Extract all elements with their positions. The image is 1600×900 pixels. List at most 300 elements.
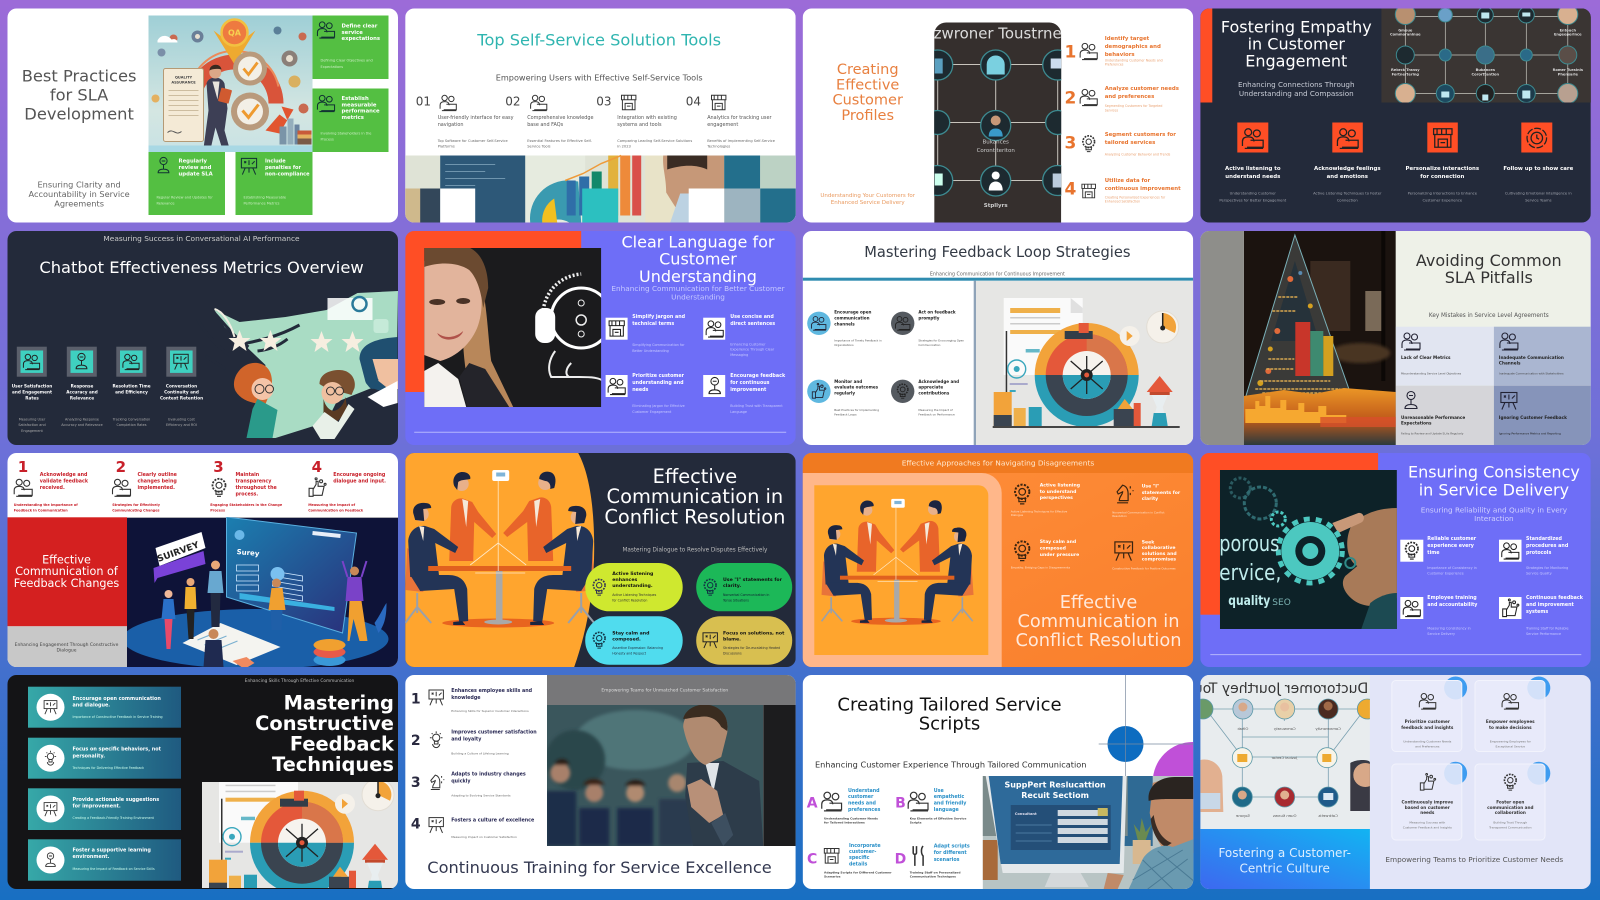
step C: Scenarios	[824, 874, 841, 878]
step 2: changes being	[138, 478, 177, 484]
heading: Communication in	[607, 485, 783, 508]
photo: team leader pointing	[545, 705, 763, 846]
tip: open communication: Encourage open communication	[72, 696, 161, 702]
heading: for SLA	[50, 86, 108, 104]
step 3: 3	[213, 458, 224, 476]
metric 3	[112, 347, 151, 427]
step A: preferences	[848, 807, 881, 813]
card: active listening	[585, 563, 683, 611]
step 1: Feedback in Communication	[14, 508, 68, 512]
step 3: Segment customers for	[1105, 132, 1176, 138]
step A	[807, 788, 881, 824]
metric 3: Resolution Time	[112, 384, 151, 388]
item: simplify jargon: Simplifying Communication for	[632, 343, 685, 347]
panel: Continuous Training for Service Excellence	[405, 675, 796, 889]
item: acknowledge feelings	[1313, 122, 1382, 202]
step 1: Identify target	[1105, 36, 1150, 42]
pitfall: unreasonable expectations: Unreasonable Performance	[1401, 415, 1465, 420]
heading: Effective	[836, 78, 899, 94]
step 3	[210, 458, 283, 512]
item: reliable experience: Importance of Consistency in	[1427, 566, 1477, 570]
subtitle: Key Mistakes in Service Level Agreements	[1429, 313, 1549, 319]
step C: specific	[849, 855, 870, 861]
item 4: 4	[411, 816, 421, 832]
item: encourage feedback: for continuous	[730, 380, 770, 386]
dark side strip	[763, 705, 796, 846]
step 2: Strategies for Effectively	[112, 503, 161, 507]
card: foster collaboration: collaboration	[1495, 810, 1526, 815]
heading: Continuous Training for Service Excellence	[427, 858, 772, 877]
panel: Creating Effective Customer Profiles	[803, 8, 1193, 238]
item: employee training: Employee training	[1427, 595, 1477, 601]
callout: include penalties for non-compliance: Performance Metrics	[244, 201, 280, 205]
card: active listening: for Conflict Resolution	[612, 598, 647, 602]
item: acknowledge contributions: Measuring the Impact of	[918, 408, 954, 412]
item: encourage open channels: Encourage open	[834, 310, 871, 314]
tip: actionable suggestions: Provide actionable suggestions	[72, 797, 159, 803]
title block: Communication of	[15, 565, 119, 578]
panel: Effective Communication of Feedback Changes	[8, 453, 398, 669]
callout: include penalties for non-compliance: Include	[265, 158, 286, 164]
panel: Clear Language for Customer Understanding	[405, 231, 796, 445]
step B: empathetic	[934, 794, 965, 800]
callout: establish measurable performance metrics: metrics	[342, 115, 364, 121]
approach: use I statements	[1112, 484, 1181, 518]
metric 4	[160, 347, 203, 427]
item: encourage feedback	[703, 373, 786, 414]
card: stay calm: Assertive Expression: Balancing	[612, 646, 663, 650]
photo: mirrored customer journey map	[1158, 675, 1377, 829]
item 1	[411, 688, 533, 713]
step A: for Tailored Interactions	[824, 820, 865, 824]
illustration: feedback stars and people	[198, 291, 398, 439]
subtitle block: Dialogue	[57, 648, 77, 654]
illustration: survey	[122, 517, 398, 669]
photo: gear and hand: SEO	[1272, 598, 1291, 608]
illustration: meeting table	[405, 470, 595, 628]
card: stay calm	[585, 616, 683, 665]
callout: define clear service expectations	[312, 16, 388, 79]
step 3: Engaging Stakeholders in the Change	[210, 503, 283, 507]
photo: mirrored customer journey map: Soyone	[1235, 813, 1250, 818]
subtitle: Ensuring Clarity and	[38, 180, 121, 190]
approach: use I statements: Nonverbal Communication in Conflict	[1112, 510, 1165, 514]
step 1: Acknowledge and	[40, 472, 88, 478]
item: standardized procedures: Strategies for Monitoring	[1526, 566, 1568, 570]
item: reliable experience: time	[1427, 550, 1440, 556]
panel: Top Self-Service Solution Tools	[405, 8, 796, 222]
approach: stay calm: under pressure	[1040, 552, 1079, 558]
heading: Chatbot Effectiveness Metrics Overview	[39, 258, 364, 277]
card: prioritize feedback	[1392, 676, 1467, 752]
decorative circle: blue	[1108, 726, 1144, 762]
panel: Best Practices for SLA Development	[8, 8, 398, 222]
accent bar	[1200, 8, 1212, 102]
panel: Ensuring Consistency in Service Delivery	[1200, 453, 1591, 667]
orange curved backdrop	[405, 453, 594, 667]
card: active listening: Active listening	[612, 571, 653, 577]
title block	[1200, 829, 1370, 889]
step 1: Understanding the Importance of	[14, 503, 78, 507]
step B: and friendly	[934, 800, 967, 806]
photo: gear and hand: ervice,	[1219, 561, 1281, 586]
subtitle: Interaction	[1474, 514, 1514, 523]
card: continuously improve: needs	[1420, 810, 1435, 815]
step 4: Enhanced Satisfaction	[1105, 200, 1140, 204]
heading: Profiles	[841, 108, 894, 124]
metric 2: Accuracy and	[66, 390, 98, 394]
approach: seek solutions: collaborative	[1142, 545, 1176, 551]
item: acknowledge contributions: Feedback on Performance	[918, 412, 955, 416]
item: act on feedback: Strategies for Encouraging Open	[918, 338, 964, 342]
step C: Adapting Scripts for Different Customer	[824, 870, 892, 874]
heading: Effective	[1060, 592, 1137, 613]
panel: Effective Communication in Conflict Resolution (orange)	[803, 453, 1193, 667]
heading: Conflict Resolution	[1015, 630, 1182, 651]
step 4: dialogue and input.	[333, 478, 386, 484]
tool 02: 02	[505, 94, 520, 108]
photo: monitor and support agent: SuppPert Reslucattion	[1004, 780, 1106, 790]
illustration: survey: SUIRVEY	[156, 540, 201, 565]
metric 4: Evaluating Cost	[168, 418, 195, 422]
step 2	[1064, 86, 1179, 112]
tool 04: Analytics for tracking user	[707, 115, 772, 121]
card: empower employees: to make decisions	[1489, 725, 1532, 730]
metric 1: Rates	[25, 396, 39, 400]
card: prioritize feedback: Prioritize customer	[1405, 719, 1451, 724]
step 3: transparency	[236, 478, 272, 484]
item 2: Building a Culture of Lifelong Learning	[451, 751, 509, 755]
step 4: Utilize data for	[1105, 178, 1151, 184]
item: prioritize understanding: Prioritize customer	[632, 373, 685, 379]
step 1: Preferences	[1105, 62, 1124, 66]
item: acknowledge contributions: Acknowledge and	[918, 379, 959, 384]
step 4: continuous improvement	[1105, 186, 1181, 192]
item 1: 1	[411, 692, 421, 708]
item: follow up	[1503, 122, 1574, 202]
approach: stay calm: composed	[1040, 546, 1066, 552]
photo: customer journey network: Corontiteriton	[977, 148, 1015, 154]
approach: seek solutions: Seek	[1142, 540, 1155, 546]
card: active listening: understanding.	[612, 583, 653, 589]
step B: Key Elements of Effective Service	[910, 816, 966, 820]
heading: Top Self-Service Solution Tools	[476, 30, 721, 50]
item: concise sentences: Experience Through Clear	[730, 348, 775, 352]
tip: open communication	[28, 687, 181, 728]
illustration: survey: Surey	[236, 548, 260, 558]
callout: regularly review and update SLA: Regularly	[178, 158, 208, 164]
step D	[895, 844, 970, 878]
item: monitor outcomes	[807, 379, 879, 416]
panel: Avoiding Common SLA Pitfalls	[1200, 231, 1591, 445]
top caption: Effective Approaches for Navigating Disagreements	[902, 458, 1094, 467]
callout: regularly review and update SLA: review and	[178, 165, 212, 171]
photo: engagement network: Gmoue	[1398, 28, 1413, 32]
approach: stay calm: Stay calm and	[1040, 539, 1076, 545]
heading: Engagement	[1245, 52, 1347, 70]
heading: Effective	[653, 465, 737, 488]
item: active listening: understand needs	[1225, 174, 1280, 180]
tool 03: systems and tools	[617, 122, 662, 128]
metric 4: Conversation	[166, 384, 197, 388]
item: act on feedback: promptly	[918, 315, 940, 320]
step 2: 2	[116, 458, 126, 476]
card: foster collaboration: Building Trust Through	[1493, 820, 1527, 824]
item: act on feedback: Act on feedback	[918, 310, 956, 314]
callout: establish measurable performance metrics	[312, 88, 388, 152]
item: acknowledge contributions: contributions	[918, 390, 950, 396]
pitfall: lack of clear metrics: Lack of Clear Metrics	[1401, 355, 1451, 360]
heading: Creating	[837, 62, 899, 78]
card: foster collaboration: Foster open	[1496, 800, 1524, 804]
card: focus on solutions	[696, 616, 792, 665]
step 1: behaviors	[1105, 52, 1135, 58]
card: continuously improve: Customer Feedback and Insights	[1403, 825, 1452, 829]
title block	[8, 517, 127, 626]
step 2: Segmenting Customers for Targeted	[1105, 104, 1162, 108]
metric 2: Accuracy and Relevance	[61, 423, 103, 427]
step B: B	[895, 796, 906, 812]
tool 03: 03	[596, 94, 611, 108]
tool 01: Top Software for Customer Self-Service	[437, 139, 508, 143]
tool 04: engagement	[707, 122, 738, 128]
card: prioritize feedback: and Preferences	[1415, 744, 1440, 748]
step A: Understand	[848, 788, 880, 794]
approach: seek solutions: compromises	[1142, 556, 1176, 562]
item: acknowledge contributions: appreciate	[918, 384, 943, 390]
metric 2: Response	[71, 384, 94, 388]
metric 3: Completion Rates	[116, 423, 147, 427]
item: simplify jargon: Simplify jargon and	[632, 314, 686, 320]
top caption: Measuring Success in Conversational AI Performance	[103, 234, 300, 243]
tool 01: Platforms	[438, 144, 455, 148]
item 1: Enhances employee skills and	[451, 688, 533, 694]
panel: Effective Communication in Conflict Resolution (dark)	[405, 453, 796, 667]
panel: Creating Tailored Service Scripts	[803, 675, 1233, 889]
photo: engagement network: Phensarie	[1558, 72, 1578, 76]
metric 2	[61, 347, 103, 427]
item: employee training	[1400, 595, 1478, 636]
callout: regularly review and update SLA: Regular Review and Updates for	[156, 196, 213, 200]
callout: regularly review and update SLA: update SLA	[178, 172, 214, 178]
item: personalize interactions: Personalizing Interactions to Enhance	[1408, 192, 1478, 196]
step 3: throughout the	[236, 485, 278, 491]
tool 01: 01	[416, 94, 431, 108]
item: reliable experience: Reliable customer	[1427, 536, 1477, 542]
item: prioritize understanding	[606, 373, 685, 414]
illustration: quality assurance	[148, 16, 312, 152]
item 4: Fosters a culture of excellence	[451, 817, 535, 823]
card: foster collaboration: Transparent Communication	[1488, 825, 1532, 829]
item 2	[411, 730, 537, 755]
tip: specific behaviors	[28, 738, 181, 779]
item: personalize interactions: Customer Experience	[1422, 198, 1463, 202]
item: active listening	[1219, 122, 1287, 202]
step 2: Clearly outline	[138, 472, 178, 478]
tool 03: Integration with existing	[617, 115, 677, 121]
illustration: quality assurance: ASSURANCE	[171, 80, 196, 84]
item: prioritize understanding: Customer Engagement	[632, 410, 672, 414]
item: standardized procedures: protocols	[1526, 550, 1551, 556]
pitfall: inadequate communication	[1494, 327, 1591, 386]
item: personalize interactions	[1405, 122, 1479, 202]
item: reliable experience: experience every	[1427, 543, 1475, 549]
step 1	[14, 458, 89, 512]
subtitle: Understanding and Compassion	[1239, 89, 1354, 98]
heading: Best Practices	[22, 66, 136, 86]
caption: Empowering Teams to Prioritize Customer Needs	[1385, 855, 1563, 864]
item: encourage feedback: Building Trust with Transparent	[730, 404, 783, 408]
card: continuously improve: based on customer	[1405, 805, 1451, 810]
item: continuous feedback	[1499, 595, 1584, 636]
step A: customer	[848, 794, 874, 800]
step A: Understanding Customer Needs	[824, 816, 878, 820]
item: acknowledge contributions	[891, 379, 959, 416]
photo: mirrored customer journey map: Comnerorsity	[1315, 726, 1341, 731]
approach: use I statements: Resolution	[1112, 514, 1127, 518]
photo: engagement network	[1381, 4, 1591, 104]
item: encourage open channels: channels	[834, 321, 855, 326]
subtitle: Ensuring Reliability and Quality in Every	[1421, 506, 1568, 514]
tool 04: Technologies	[706, 144, 730, 148]
step 4: Encourage ongoing	[333, 472, 386, 478]
step 1	[1064, 36, 1163, 66]
photo: gear and hand	[1219, 470, 1397, 629]
callout: establish measurable performance metrics: Process	[320, 138, 334, 142]
subtitle: Understanding	[671, 292, 725, 302]
item: personalize interactions: Personalize interactions	[1405, 166, 1479, 172]
subtitle: Agreements	[54, 198, 104, 208]
item: standardized procedures: Service Quality	[1526, 572, 1552, 576]
top band	[547, 675, 796, 705]
callout: establish measurable performance metrics: performance	[342, 109, 380, 115]
item: prioritize understanding: needs	[632, 387, 649, 393]
tip: supportive environment: Measuring the Impact of Feedback on Service Skills	[72, 867, 155, 871]
item: continuous feedback: Continuous feedback	[1526, 595, 1584, 601]
item: simplify jargon: Better Understanding	[632, 349, 669, 353]
item 4: Measuring Impact on Customer Satisfaction	[451, 835, 517, 839]
tool 02: Essential Features for Effective Self-	[527, 139, 593, 143]
photo: mirrored customer journey map: Ductoromer Jourthey Tourmey	[1158, 681, 1368, 697]
step 3	[1064, 132, 1176, 156]
card: continuously improve: Continuously improve	[1401, 800, 1453, 804]
item 2: 2	[411, 733, 421, 749]
item 3: quickly	[451, 779, 471, 785]
approach: use I statements: Use "I"	[1142, 484, 1159, 490]
item 3	[411, 772, 526, 797]
tip: specific behaviors: Focus on specific behaviors, not	[72, 747, 162, 753]
card: empower employees	[1475, 676, 1550, 752]
pitfall: ignoring feedback: Ignoring Performance Metrics and Reporting	[1499, 431, 1561, 435]
metric 2: Relevance	[70, 396, 94, 400]
item: active listening: Understanding Customer	[1230, 192, 1276, 196]
item: standardized procedures	[1499, 536, 1569, 576]
photo: engagement network: Bukances	[1476, 68, 1495, 72]
illustration: quality assurance: QA	[228, 28, 242, 38]
photo: engagement network: Rebrck Transy	[1391, 68, 1420, 72]
item: continuous feedback: Training Staff for Reliable	[1525, 626, 1569, 630]
item: act on feedback: Communication	[918, 343, 941, 347]
panel: Mastering Constructive Feedback Techniques	[8, 675, 398, 896]
item: simplify jargon: technical terms	[632, 321, 674, 327]
step A: needs and	[848, 800, 877, 806]
photo: engagement network: Cororttantion	[1472, 72, 1499, 76]
card: foster collaboration: communication and	[1487, 805, 1533, 810]
item 3: Adapts to industry changes	[451, 772, 526, 778]
subtitle: Empowering Users with Effective Self-Service Tools	[496, 72, 703, 82]
step D: Communication Techniques	[910, 874, 956, 878]
tool 01: navigation	[438, 122, 464, 128]
item: encourage open channels	[807, 310, 882, 347]
item 2: and loyalty	[451, 737, 482, 743]
callout: establish measurable performance metrics: Establish	[342, 96, 369, 102]
step 4: Measuring the Impact of	[308, 503, 356, 507]
title block: Effective	[42, 554, 91, 566]
pitfall: inadequate communication: Inadequate Communication	[1499, 355, 1564, 360]
approach: active listening: Dialogue	[1011, 513, 1023, 517]
photo: mirrored customer journey map: Ouen Kunws	[1273, 813, 1296, 818]
approach: use I statements: statements for	[1142, 490, 1181, 496]
step C: customer-	[849, 849, 876, 855]
pitfall: lack of clear metrics: Misunderstanding Service Level Objectives	[1401, 371, 1462, 375]
subtitle: Accountability in Service	[29, 189, 130, 199]
photo: mirrored customer journey map: Comwuraty	[1273, 726, 1296, 731]
panel: Fostering a Customer-Centric Culture	[1158, 675, 1591, 889]
item: concise sentences: direct sentences	[730, 321, 775, 327]
decorative circle: purple	[1153, 742, 1233, 822]
approach: seek solutions: solutions and	[1142, 551, 1177, 557]
item 1: knowledge	[451, 695, 481, 701]
subtitle: Mastering Dialogue to Resolve Disputes Effectively	[622, 548, 768, 554]
metric 2: Analyzing Response	[65, 418, 99, 422]
tool 02: Service Tools	[527, 144, 551, 148]
metric 1: and Engagement	[12, 390, 52, 394]
item: reliable experience: Customer Experience	[1427, 572, 1464, 576]
panel: Mastering Feedback Loop Strategies	[803, 231, 1193, 445]
item: continuous feedback: Service Performance	[1526, 632, 1561, 636]
panel: Chatbot Effectiveness Metrics Overview	[8, 231, 398, 445]
card: continuously improve: Measuring Success with	[1409, 820, 1445, 824]
tool 03	[596, 94, 692, 148]
photo: mirrored customer journey map: Cottrwetis	[1318, 813, 1338, 818]
pitfall: unreasonable expectations: Failing to Review and Update SLAs Regularly	[1401, 431, 1464, 435]
top caption: Enhancing Skills Through Effective Communication	[245, 678, 355, 684]
step 4: Creating Personalized Experiences for	[1105, 196, 1166, 200]
heading: Ensuring Consistency	[1408, 462, 1580, 482]
step C	[807, 843, 892, 878]
item: encourage feedback: Language	[730, 410, 747, 414]
callout: define clear service expectations: Defining Clear Objectives and	[320, 58, 373, 62]
metric 1: Measuring User	[19, 418, 46, 422]
item: encourage open channels: Importance of Timely Feedback in	[834, 338, 882, 342]
item: employee training: and accountability	[1427, 602, 1478, 608]
photo: engagement network: Romer Turainis	[1553, 68, 1583, 72]
peach frame	[803, 473, 1002, 667]
card: use I statements: Tense Situations	[722, 598, 749, 602]
item 4	[411, 816, 535, 839]
heading: Constructive	[255, 712, 394, 735]
step C: Incorporate	[849, 843, 881, 849]
heading: Feedback	[290, 732, 395, 756]
callout: include penalties for non-compliance: Establishing Measurable	[244, 196, 286, 200]
item: follow up: Follow up to show care	[1503, 166, 1574, 172]
item: employee training: Service Delivery	[1427, 632, 1455, 636]
step A: A	[807, 796, 818, 812]
tool 03: in 2023	[617, 144, 631, 148]
step C: details	[849, 862, 868, 868]
approach: active listening	[1011, 482, 1080, 517]
photo: customer journey network: Stpllyrs	[984, 203, 1008, 209]
